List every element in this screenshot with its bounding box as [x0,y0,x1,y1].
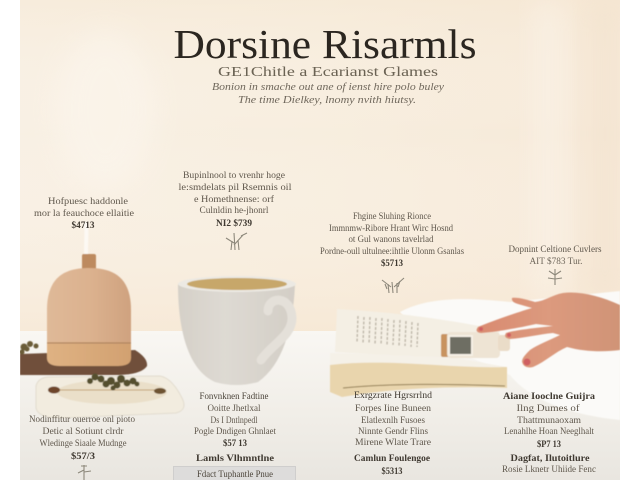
callout: bottle [508,244,602,266]
cup handle [261,300,292,360]
bottom text: hand: $P7 13 [537,439,561,449]
cup body [178,284,295,385]
bottom text: hand: Thattmunaoxam [517,415,581,425]
diffuser with tray and steam [20,222,147,375]
callout: tea: Culnldin he-jhonrl [200,205,269,215]
small bottle [441,332,510,358]
diffuser base [47,342,131,366]
bottom text: hand: Rosie Lknetr Uhiide Fenc [502,464,596,474]
lower page [330,353,506,367]
bottom text: book: Forpes Iine Buneen [355,403,432,413]
callout: diffuser: $4713 [72,220,95,230]
bottom text: cup: Ds I Dntlnpedl [210,415,258,425]
coaster with dried herbs [36,374,184,418]
bottom text: cup: Pogle Dndigen Ghnlaet [194,426,276,436]
bottom text: hand [502,391,596,474]
callout: diffuser [34,196,134,230]
bottom text: hand: Dagfat, Ilutoitlure [510,453,590,463]
icon: herb sprig coaster [78,465,91,480]
diffuser body [47,268,131,342]
intro text: The time Dielkey, lnomy nvith hiutsy. [238,95,416,106]
background: wall and curtains [20,0,620,335]
boxed note [174,466,296,480]
lower book [330,362,507,397]
open book with bottle [330,309,510,397]
bottom text: cup: Fonvnknen Fadtine [200,391,269,401]
bottom text: coaster: Wledinge Siaale Mudnge [40,438,126,448]
bottom text: cup: $57 13 [223,438,247,448]
bottom text: book: Ninnte Gendr Flins [358,426,428,436]
intro text [212,82,444,106]
icon: herb sprig book [382,278,404,293]
upper page [335,309,500,358]
bottom text: coaster [29,414,135,461]
boxed note: Fdact Tuphantle Pnue [197,469,273,479]
callout: book: Pordne-oull ultulnee:ihtlie Ulonm Gsanlas [320,246,464,256]
bottom text: coaster: Nodinffitur ouerroe onl pioto [29,414,135,424]
icon: herb sprig tea [226,233,247,250]
callout: tea: NI2 $739 [216,218,253,228]
callout: bottle: Dopnint Celtione Cuvlers [508,244,602,254]
callout: book: Fhgine Sluhing Rionce [353,211,431,221]
steam [84,222,88,254]
bottom text: book: Exrgzrate Hgrsrrlnd [354,390,433,400]
diffuser neck [82,254,96,271]
callout: book: $5713 [381,258,403,268]
callout: tea: le:smdelats pil Rsemnis oil [178,182,292,192]
bottom text: book: Camlun Foulengoe [354,453,430,463]
bottom text: hand: Ilng Dumes of [516,403,580,413]
callout: bottle: AIT $783 Tur. [530,256,582,266]
bottom text: cup [194,391,276,463]
callout: book: ot Gul wanons tavelrlad [348,234,434,244]
callout: tea [178,170,292,228]
title: Dorsine Risarmls [174,21,476,67]
callout: tea: Bupinlnool to vrenhr hoge [183,170,285,180]
wooden tray [20,350,147,375]
callout: diffuser: mor la feauchoce ellaitie [34,208,134,218]
bottom text: book [354,390,433,476]
bottom text: book: Elatlexnlh Fusoes [361,415,425,425]
intro text: Bonion in smache out ane of ienst hire polo buley [212,82,444,93]
sprig on tray [20,341,38,354]
tea cup [178,276,296,385]
bottom text: book: Mirene Wlate Trare [355,437,431,447]
bottom text: hand: Lenahlhe Hoan Neeglhalt [504,426,594,436]
subtitle: GE1Chitle a Ecarianst Glames [218,65,438,80]
tea surface [187,278,287,290]
callout: book: Immnmw-Ribore Hrant Wirc Hosnd [329,223,453,233]
bottom text: coaster: $57/3 [71,451,96,461]
white fabric [400,291,620,420]
callout: tea: e Homethnense: orf [194,194,274,204]
icon: herb sprig bottle [548,269,562,285]
callout: book [320,211,464,268]
bottom text: book: $5313 [382,466,403,476]
callout: diffuser: Hofpuesc haddonle [48,196,128,206]
bottom text: cup: Lamls Vlhmntlne [196,453,274,463]
bottom text: cup: Ooitte Jhetlxal [208,403,261,413]
bottom text: coaster: Detic al Sotiunt clrdr [42,426,124,436]
bottom text: hand: Aiane Iooclne Guijra [503,391,596,401]
table surface [20,331,620,480]
hand reaching for bottle [477,293,620,367]
